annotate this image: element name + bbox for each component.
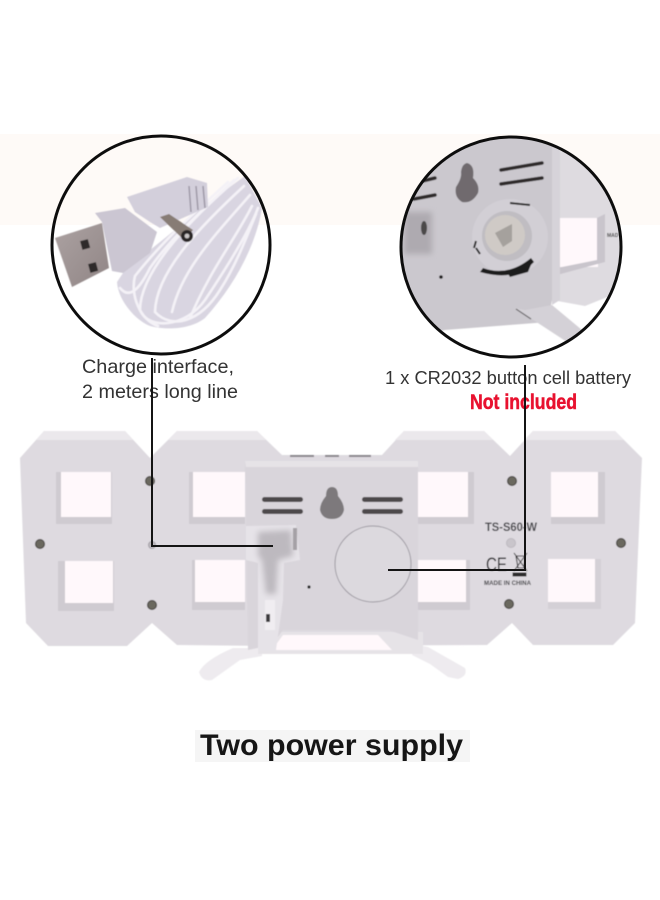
label: charge interface <box>82 356 238 403</box>
clock body: rear digits <box>20 431 642 646</box>
charge recess <box>246 525 300 650</box>
rear labels <box>290 455 371 457</box>
leader line: charge port <box>152 358 273 546</box>
caption: Two power supply <box>200 729 463 762</box>
side recess <box>404 212 432 254</box>
jack metal pin <box>160 214 193 240</box>
circle: battery compartment <box>400 130 625 342</box>
coiled white cable <box>120 178 258 326</box>
stand <box>199 645 466 680</box>
right clock segment <box>558 150 620 306</box>
circle outline right <box>401 137 621 357</box>
caption background <box>195 730 470 762</box>
side text: MAD <box>607 233 619 239</box>
dial black arc <box>480 258 534 275</box>
keyhole <box>456 163 478 202</box>
screws <box>36 476 626 610</box>
USB metal shell <box>55 223 109 287</box>
vents and keyhole <box>262 487 403 589</box>
back plate <box>400 130 552 340</box>
clock product <box>20 431 642 680</box>
leader line: battery <box>388 365 525 570</box>
coiled cable mass <box>117 176 262 328</box>
clock product: MADE IN CHINA <box>484 580 531 587</box>
background band <box>0 134 660 225</box>
dial <box>472 199 548 275</box>
clock windows <box>56 472 605 611</box>
circle: USB charge cable <box>55 176 262 328</box>
jack overmould <box>127 177 208 228</box>
label: battery: 1 x CR2032 button cell battery <box>385 368 631 388</box>
vents <box>414 163 542 199</box>
bevel highlights <box>36 431 624 440</box>
model text: TS-S60-W <box>485 520 538 534</box>
USB plug body <box>95 208 157 273</box>
circle outline left <box>52 136 270 354</box>
lower frame <box>258 632 423 654</box>
battery cover <box>335 526 411 602</box>
back plate <box>245 461 418 650</box>
label: not included: Not included <box>470 391 577 414</box>
stand <box>515 305 582 342</box>
label: charge interface: Charge interface, <box>82 356 234 378</box>
infographic canvas <box>20 134 642 762</box>
clock product: CE <box>486 555 507 576</box>
label: charge interface: 2 meters long line <box>82 381 238 403</box>
recycling bin mark <box>513 553 527 576</box>
